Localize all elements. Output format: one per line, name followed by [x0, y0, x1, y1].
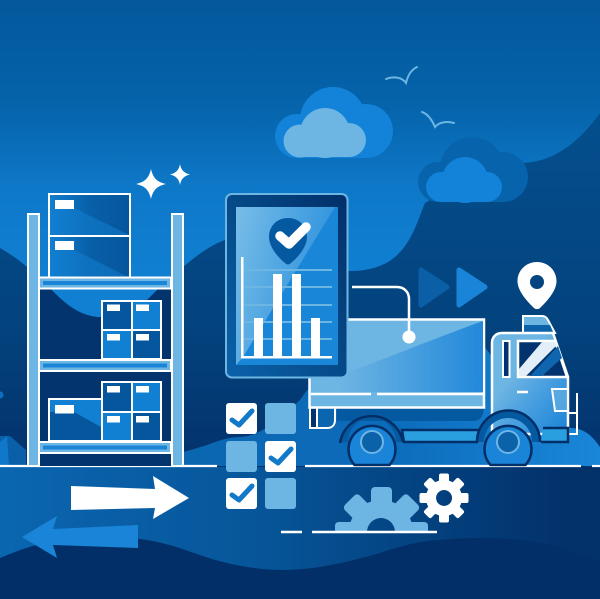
front bumper [541, 428, 568, 442]
checkbox checked 3 [226, 478, 257, 509]
checkbox empty 2 [226, 441, 257, 472]
white arrow right [71, 476, 189, 519]
cloud: small back [418, 137, 528, 202]
top box upper [49, 194, 130, 236]
location pin [518, 262, 556, 309]
warehouse shelf [28, 194, 183, 466]
play arrows [421, 270, 485, 305]
birds [386, 67, 454, 127]
foreground hill behind truck [183, 325, 600, 466]
visor [523, 316, 555, 333]
check pin [269, 218, 307, 264]
middle box stack [102, 301, 161, 359]
truck [310, 316, 577, 465]
shelf bay background [39, 288, 171, 466]
small gear [420, 474, 468, 522]
truck under-shade [337, 408, 484, 421]
checkbox checked 1 [226, 403, 257, 434]
tablet screen [236, 207, 338, 365]
cloud: large back [275, 87, 393, 158]
dark mountain background [0, 113, 600, 470]
bottom left box [49, 399, 102, 441]
bottom dark wave [0, 538, 600, 599]
blue arrow left [22, 516, 138, 558]
left small hill [0, 392, 26, 466]
rear bumper bracket [310, 408, 335, 428]
front wheel [477, 411, 540, 465]
cab body [492, 333, 568, 434]
shelf beams [39, 278, 171, 453]
shelf uprights [28, 214, 183, 466]
screen highlight [236, 207, 335, 365]
bar chart [241, 257, 332, 358]
headlight [552, 389, 568, 411]
connector line [352, 287, 416, 344]
checkbox empty 3 [265, 478, 296, 509]
ground [0, 467, 600, 599]
checkbox checked 2 [265, 441, 296, 472]
bottom box stack [102, 382, 161, 441]
sky background [0, 0, 600, 470]
sparkles [136, 164, 190, 199]
grid lines [243, 270, 332, 339]
side window [503, 341, 510, 377]
gear baseline [281, 531, 437, 533]
cloud: small front [426, 157, 502, 203]
ground line [0, 465, 600, 467]
top box lower [49, 236, 130, 278]
large gear [335, 487, 428, 532]
skirt [402, 430, 480, 442]
rear wheel [340, 416, 403, 465]
windshield [518, 341, 567, 377]
door handle [517, 391, 528, 393]
cloud: large front [284, 108, 366, 158]
tablet [226, 194, 348, 378]
front guard [567, 393, 577, 434]
tablet frame [226, 194, 348, 378]
checklist [226, 403, 296, 509]
checkbox empty 1 [265, 403, 296, 434]
cargo container [310, 320, 484, 408]
